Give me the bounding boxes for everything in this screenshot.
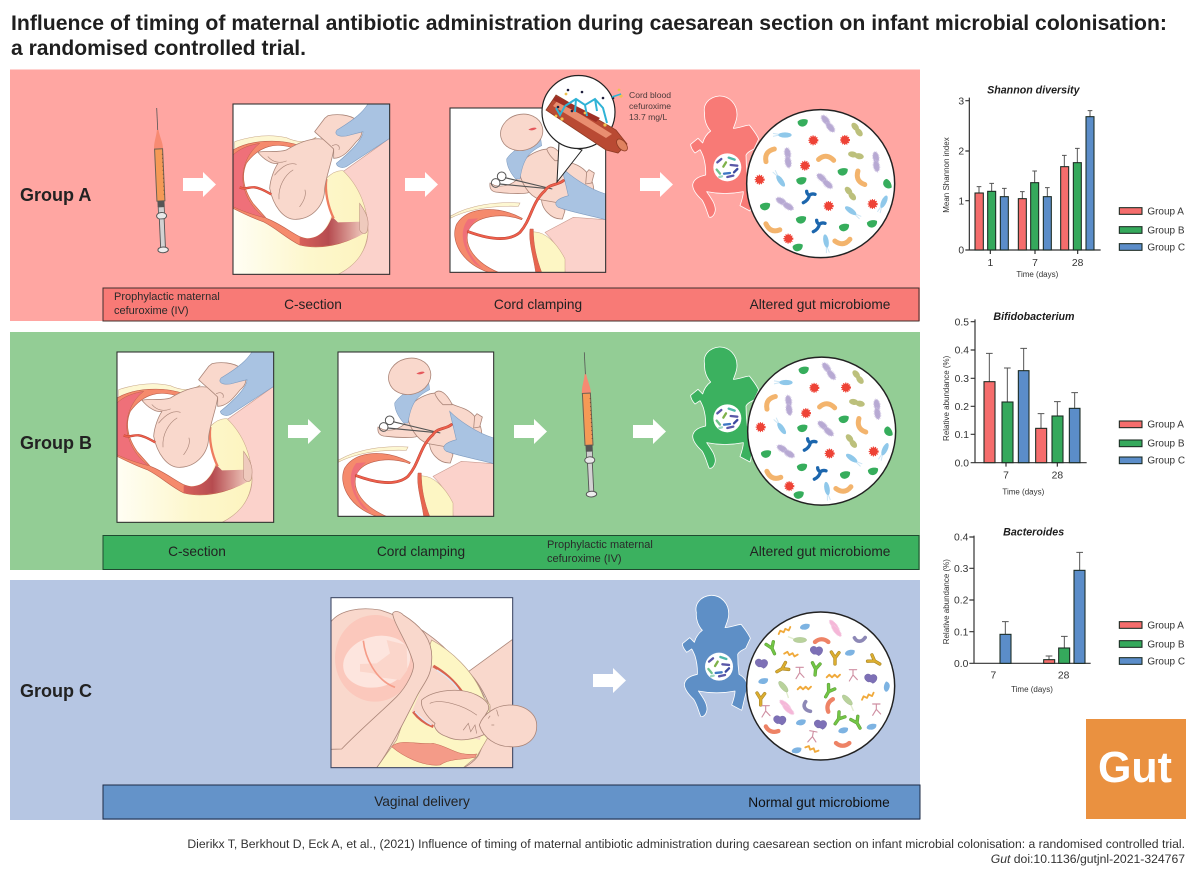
legend: Group C [1147, 456, 1185, 467]
callout text: cefuroxime level [629, 90, 671, 122]
axes [958, 96, 1101, 279]
label strip A: C-section [284, 297, 342, 312]
y axis label: Relative abundance (%) [942, 559, 951, 644]
chart title: Shannon diversity [987, 84, 1081, 96]
label strip B: Prophylactic maternal [547, 539, 653, 551]
axes: 0.0 [954, 659, 969, 670]
chart: Shannon diversity [942, 84, 1185, 279]
legend: Group A [1147, 420, 1184, 431]
bars [984, 348, 1080, 463]
axes: 7 [1032, 258, 1038, 269]
axes: 0.2 [954, 596, 969, 607]
citation: Dierikx T, Berkhout D, Eck A, et al., (2021) Influence of timing of maternal antibiotic administration during caesarean section on infant microbial colonisation: a randomised controlled trial. [187, 837, 1185, 851]
illustration: cord clamping A [450, 108, 606, 272]
axes: 0.3 [955, 374, 969, 385]
title [11, 12, 1167, 60]
label strip A [103, 288, 919, 321]
panel: Group A [10, 70, 920, 321]
axes: 3 [958, 96, 964, 107]
legend: Group A [1147, 620, 1184, 631]
bars [975, 111, 1094, 250]
y axis label: Relative abundance (%) [942, 355, 951, 441]
legend: Group B [1147, 225, 1185, 236]
arrow A2 [405, 172, 438, 197]
chart title: Bifidobacterium [993, 311, 1075, 323]
callout text: cefuroxime level: 13.7 mg/L [629, 112, 667, 122]
label strip A: Prophylactic maternal [114, 291, 220, 303]
axes: 0.4 [955, 346, 969, 357]
axes: Time (days) [1011, 685, 1053, 694]
citation: Gut doi:10.1136/gutjnl-2021-324767 [991, 852, 1185, 866]
axes: Time (days) [1016, 270, 1059, 279]
panel: Group B [10, 332, 920, 570]
label strip C: Normal gut microbiome [748, 795, 890, 810]
illustration: cord clamping B [338, 352, 494, 516]
chart: Bifidobacterium [942, 311, 1185, 496]
legend: Group A [1147, 206, 1184, 217]
axes: 0.2 [955, 402, 969, 413]
axes: 7 [990, 671, 996, 682]
legend: Group C [1147, 242, 1185, 253]
axes: 0.1 [954, 627, 969, 638]
axes: 28 [1072, 258, 1084, 269]
icon: syringe A [152, 108, 168, 253]
y axis label: Mean Shannon index [942, 137, 951, 213]
axes: 28 [1058, 671, 1070, 682]
label strip B: C-section [168, 544, 226, 559]
axes: 28 [1052, 471, 1063, 482]
label strip B: cefuroxime (IV) [547, 553, 622, 565]
label strip A: Cord clamping [494, 297, 582, 312]
label strip A: Altered gut microbiome [750, 297, 890, 312]
icon: infant silhouette A [691, 96, 759, 217]
callout: cord blood cefuroxime [542, 76, 630, 182]
bars [1000, 552, 1085, 663]
label strip A: cefuroxime (IV) [114, 305, 189, 317]
axes [954, 533, 1091, 694]
chart title: Bacteroides [1003, 527, 1064, 539]
legend [1119, 620, 1185, 667]
axes: 0.1 [955, 430, 969, 441]
arrow C1 [593, 668, 626, 693]
arrow A3 [640, 172, 673, 197]
callout text: cefuroxime level: cefuroxime [629, 101, 671, 111]
label strip C [103, 785, 920, 819]
arrow A1 [183, 172, 216, 197]
axes: 0 [958, 246, 964, 257]
icon: infant silhouette B [691, 347, 759, 468]
illustration: C-section B [117, 352, 274, 522]
axes [955, 317, 1087, 496]
label strip B [103, 536, 919, 570]
illustration: vaginal delivery [331, 598, 537, 768]
axes: 7 [1003, 471, 1009, 482]
axes: 0.3 [954, 564, 969, 575]
title: a randomised controlled trial. [11, 37, 306, 60]
microbiome circle A [747, 110, 895, 258]
legend [1119, 420, 1185, 467]
label strip B: Cord clamping [377, 544, 465, 559]
heading: Group A: Group A [20, 185, 91, 205]
heading: Group B: Group B [20, 433, 92, 453]
axes: Time (days) [1002, 487, 1045, 496]
axes: 0.5 [955, 317, 969, 328]
logo: Gut journal [1086, 719, 1186, 819]
illustration: C-section A [233, 104, 390, 274]
panel: Group C [10, 580, 920, 820]
label strip B: Altered gut microbiome [750, 544, 890, 559]
chart: Bacteroides [942, 527, 1185, 694]
icon: infant silhouette C [682, 595, 750, 717]
arrow B3 [633, 419, 666, 444]
microbiome circle C [747, 612, 895, 760]
logo: Gut journal: Gut [1098, 743, 1172, 792]
legend: Group B [1147, 439, 1185, 450]
arrow B1 [288, 419, 321, 444]
axes: 2 [958, 147, 964, 158]
label strip C: Vaginal delivery [374, 794, 470, 809]
legend [1119, 206, 1185, 253]
axes: 0.4 [954, 533, 969, 544]
heading: Group C: Group C [20, 681, 92, 701]
icon: syringe B [579, 352, 597, 497]
legend: Group C [1147, 656, 1185, 667]
legend: Group B [1147, 639, 1185, 650]
axes: 0.0 [955, 458, 969, 469]
axes: 1 [958, 196, 964, 207]
axes: 1 [987, 258, 993, 269]
title: Influence of timing of maternal antibiotic administration during caesarean section on infant microbial colonisation: [11, 12, 1167, 35]
microbiome circle B [748, 357, 896, 505]
callout text: cefuroxime level: Cord blood [629, 90, 671, 100]
arrow B2 [514, 419, 547, 444]
citation [187, 837, 1185, 866]
